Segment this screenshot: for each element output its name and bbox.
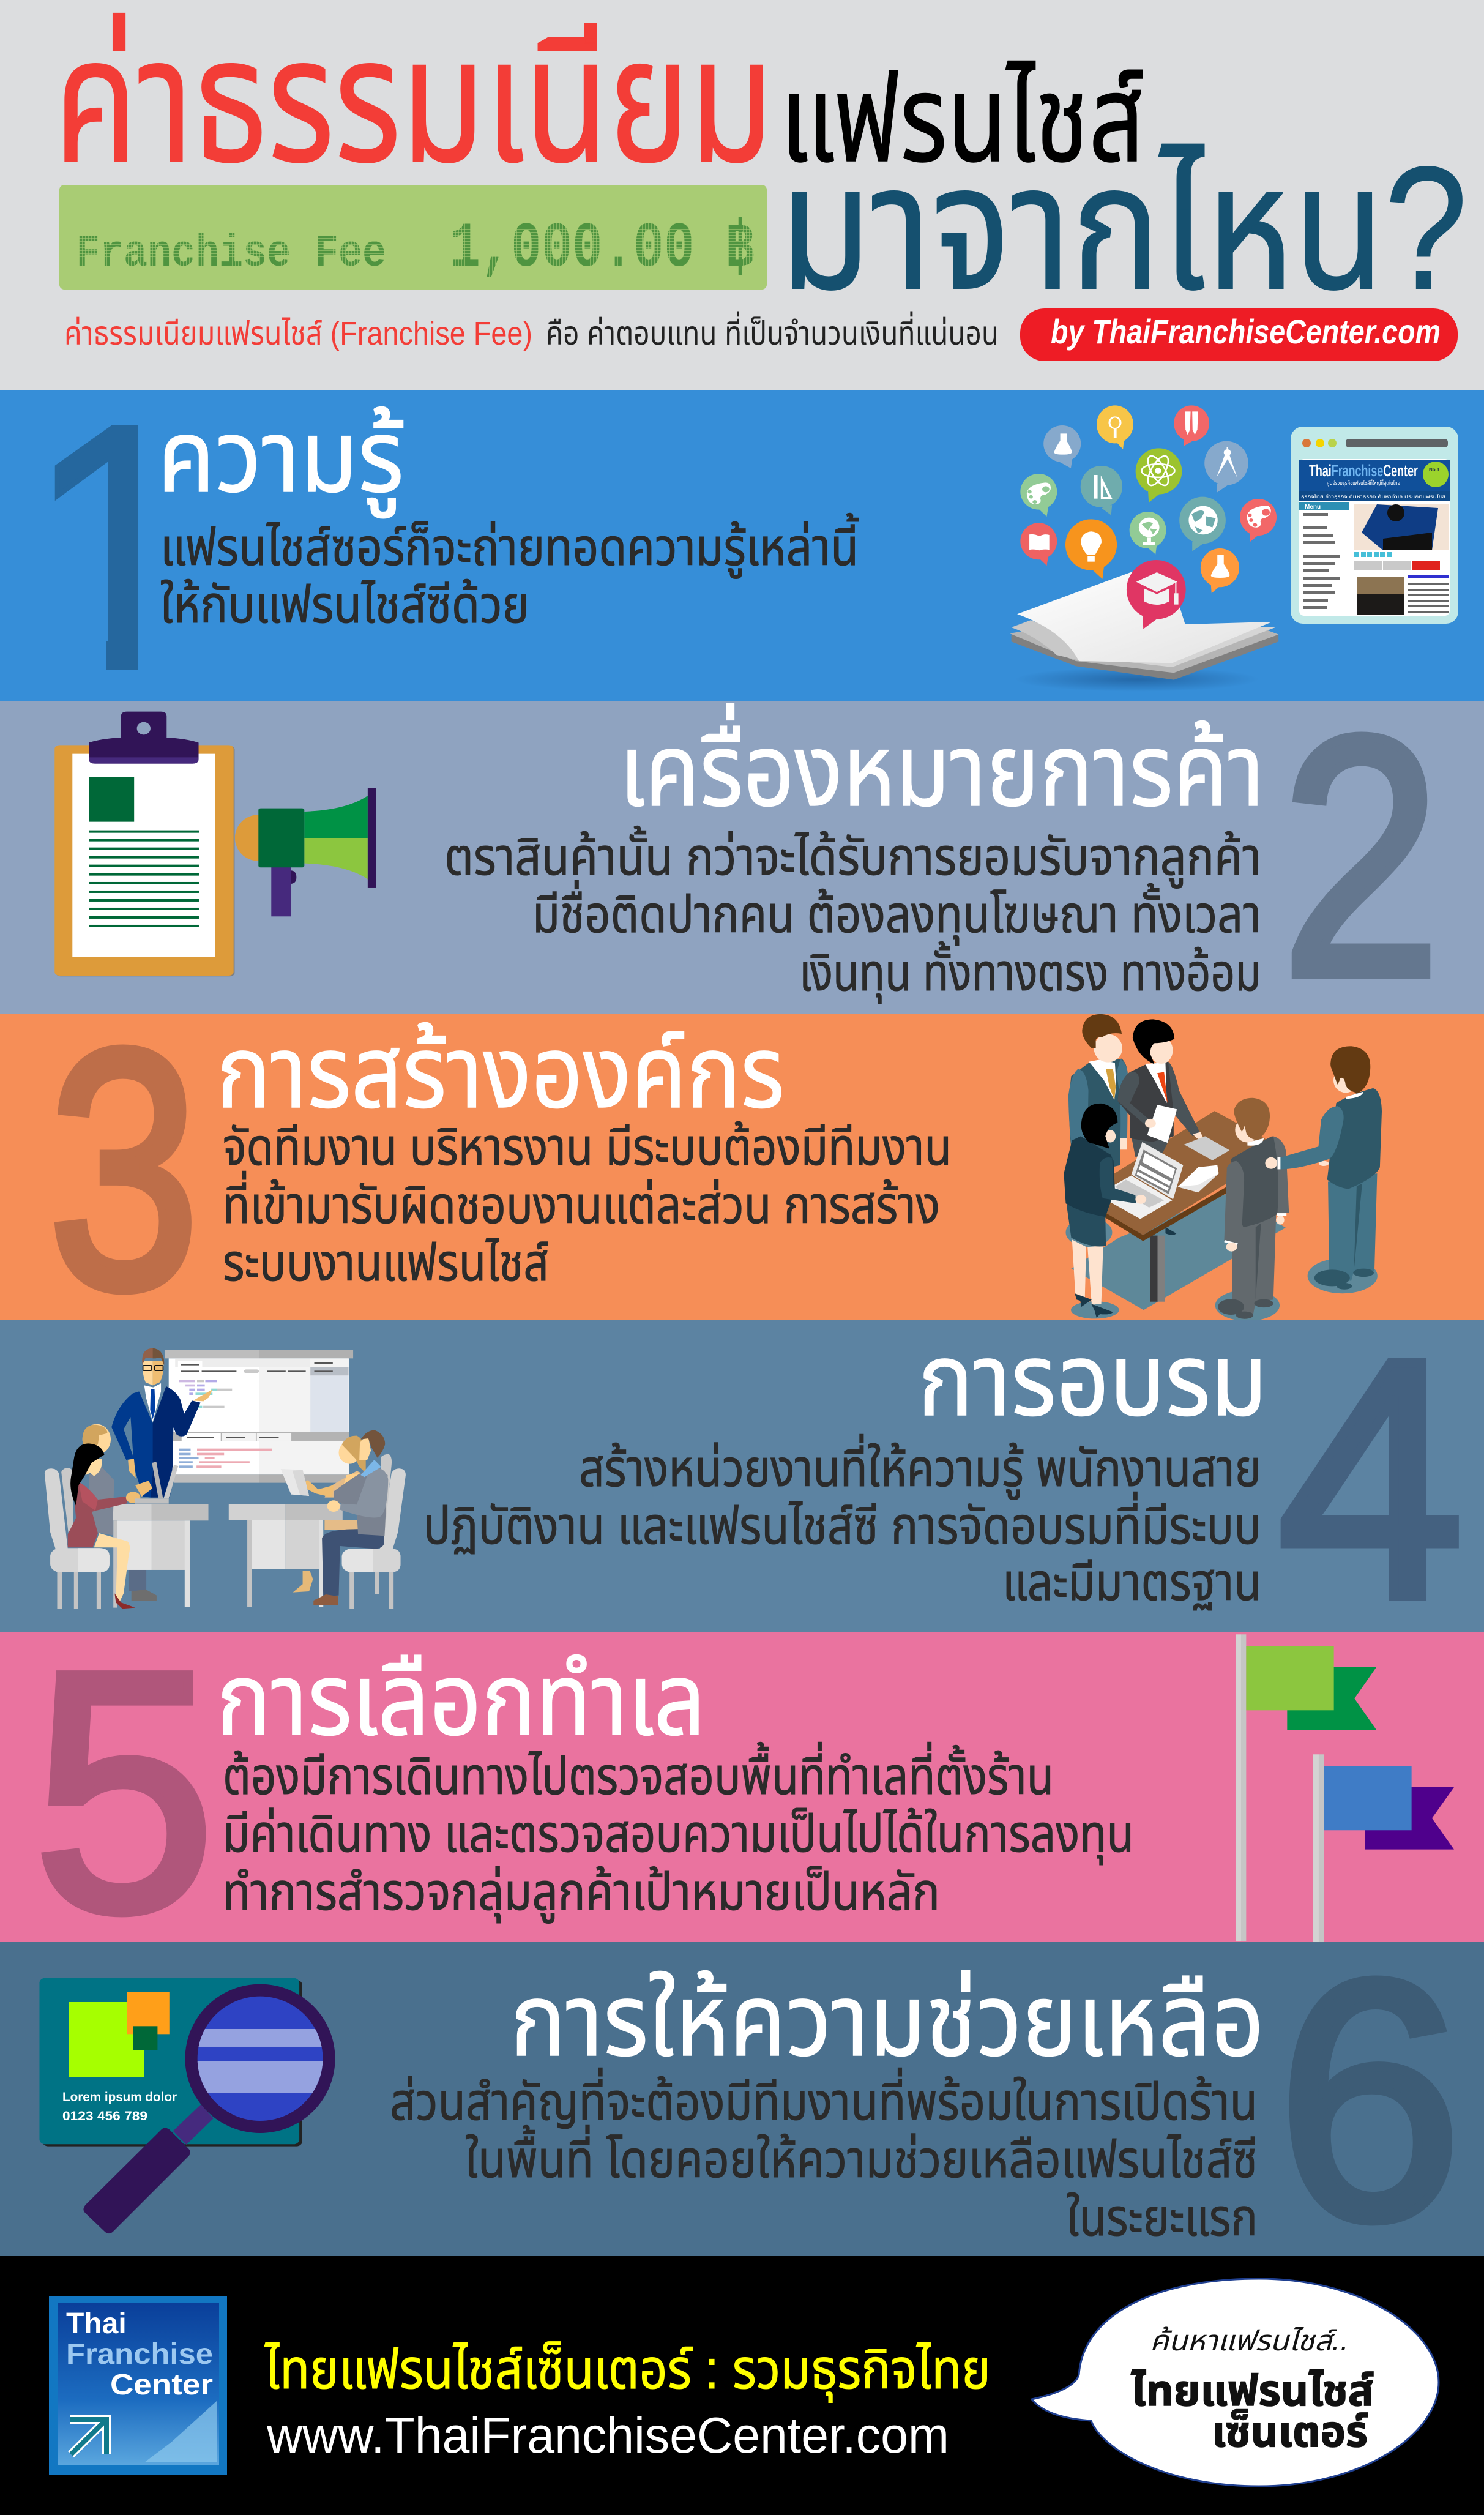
heading: การให้ความช่วยเหลือ (510, 1964, 1264, 2077)
body text (223, 1118, 952, 1291)
person: man in grey from behind (1218, 1098, 1289, 1319)
icon bubble: globe (1179, 497, 1226, 551)
website mockup (1291, 427, 1458, 624)
icon bubble: light bulb (1065, 519, 1117, 579)
panel 3: organisation (0, 979, 1484, 1359)
LCD fee display (59, 185, 767, 290)
numeral 1: 1 (24, 351, 214, 744)
illustration: clipboard and megaphone (54, 712, 376, 976)
LCD fee display: 1,000.00 ฿ (450, 213, 756, 285)
panel 2: trademark (0, 667, 1484, 1046)
panel 6: support (0, 1942, 1484, 2256)
body text (160, 513, 859, 633)
website mockup: ThaiFranchiseCenter (1309, 462, 1418, 480)
body text: ให้กับแฟรนไชส์ซีด้วย (160, 576, 529, 633)
icon bubble: flask (1043, 425, 1081, 468)
icon bubble: atom (1136, 448, 1182, 503)
body text: มีชื่อติดปากคน ต้องลงทุนโฆษณา ทั้งเวลา (532, 880, 1261, 946)
illustration: business card and magnifier: 0123 456 789 (62, 2109, 147, 2123)
person: woman with red tie (1117, 1019, 1205, 1157)
illustration: business card and magnifier (39, 1978, 335, 2233)
speech bubble: ค้นหาแฟรนไชส์.. (1150, 2325, 1349, 2356)
byline pill (1020, 308, 1458, 361)
subtitle (64, 311, 999, 352)
speech bubble (1032, 2279, 1439, 2486)
projector screen (165, 1350, 353, 1483)
subtitle: คือ ค่าตอบแทน ที่เป็นจำนวนเงินที่แน่นอน (546, 311, 999, 352)
presenter (111, 1348, 212, 1601)
icon bubble: magnifier (1097, 405, 1133, 449)
footer Thai name: ไทยแฟรนไชส์เซ็นเตอร์ : รวมธุรกิจไทย (264, 2339, 991, 2402)
table papers and laptop (1103, 1136, 1229, 1219)
speech bubble: เซ็นเตอร์ (1212, 2408, 1368, 2456)
right attendees (281, 1430, 406, 1609)
person: man in teal from behind (1265, 1046, 1382, 1290)
icon bubble: pens (1174, 405, 1209, 446)
LCD fee display: Franchise Fee (76, 228, 386, 280)
illustration: training room (45, 1348, 406, 1609)
left table (94, 1504, 209, 1608)
logo: Center (110, 2369, 213, 2401)
table (1078, 1111, 1283, 1302)
icon bubble: palette green (1020, 474, 1057, 517)
panel 5: location (0, 1602, 1484, 1981)
icon bubble: compass (1204, 441, 1248, 493)
body text: ที่เข้ามารับผิดชอบงานแต่ละส่วน การสร้าง (223, 1171, 940, 1234)
green flag (1236, 1634, 1376, 1941)
icon bubble: graduation cap (1127, 560, 1186, 629)
icon bubble: book (1020, 523, 1057, 566)
body text (223, 1742, 1134, 1923)
body text (390, 2068, 1258, 2246)
subtitle: ค่าธรรมเนียมแฟรนไชส์ (Franchise Fee) (64, 315, 532, 352)
heading: การอบรม (918, 1324, 1267, 1437)
website mockup: No.1 (1429, 467, 1440, 473)
body text: ในระยะแรก (1067, 2189, 1258, 2246)
heading: การเลือกทำเล (217, 1643, 706, 1756)
numeral 4: 4 (1278, 1289, 1464, 1669)
body text: แฟรนไชส์ซอร์ก็จะถ่ายทอดความรู้เหล่านี้ (160, 513, 859, 578)
body text: สร้างหน่วยงานที่ให้ความรู้ พนักงานสาย (579, 1434, 1261, 1500)
body text: มีค่าเดินทาง และตรวจสอบความเป็นไปได้ในการลงทุน (223, 1805, 1134, 1865)
numeral 3: 3 (48, 979, 199, 1359)
logo: Thai (66, 2308, 127, 2340)
speech bubble: ไทยแฟรนไชส์ (1131, 2367, 1374, 2415)
header panel (0, 0, 1484, 390)
body text: ทำการสำรวจกลุ่มลูกค้าเป้าหมายเป็นหลัก (223, 1863, 940, 1923)
body text: เงินทุน ทั้งทางตรง ทางอ้อม (799, 941, 1261, 1004)
body text: ในพื้นที่ โดยคอยให้ความช่วยเหลือแฟรนไชส์ซี (465, 2125, 1258, 2188)
body text: จัดทีมงาน บริหารงาน มีระบบต้องมีทีมงาน (223, 1118, 952, 1176)
website mockup: ธุรกิจไทย ข่าวธุรกิจ ค้นหาธุรกิจ ค้นหาทำเล ประเภทแฟรนไชส์ (1301, 493, 1446, 499)
clipboard (54, 712, 234, 976)
logo (49, 2296, 227, 2475)
body text: ระบบงานแฟรนไชส์ (223, 1234, 549, 1291)
right table (229, 1504, 343, 1607)
icon bubble: flask orange (1201, 548, 1239, 593)
icon bubble: set square (1081, 466, 1122, 515)
body text: ส่วนสำคัญที่จะต้องมีทีมงานที่พร้อมในการเปิดร้าน (390, 2068, 1258, 2131)
panel 4: training (0, 1289, 1484, 1669)
illustration: business team at table (1064, 1014, 1382, 1321)
icon bubble: palette red (1240, 499, 1277, 542)
panel 1: knowledge (0, 390, 1484, 701)
title: black: แฟรนไชส์ (780, 51, 1144, 187)
body text: และมีมาตรฐาน (1002, 1553, 1261, 1611)
person: man with yellow tie (1068, 1014, 1128, 1169)
body text: ปฏิบัติงาน และแฟรนไชส์ซี การจัดอบรมที่มีระบบ (423, 1492, 1261, 1555)
logo: Franchise (66, 2338, 213, 2371)
icon bubble: desk globe (1130, 512, 1166, 555)
blue flag (1313, 1754, 1454, 1943)
left attendees (45, 1424, 178, 1609)
numeral 5: 5 (34, 1602, 215, 1981)
heading: ความรู้ (157, 400, 404, 518)
heading: เครื่องหมายการค้า (619, 703, 1264, 827)
body text (423, 1434, 1261, 1611)
illustration: book with icon bubbles (1010, 405, 1278, 692)
megaphone (235, 788, 376, 916)
body text (444, 826, 1261, 1004)
heading: การสร้างองค์กร (217, 1016, 785, 1129)
website mockup: Menu (1305, 504, 1321, 510)
body text: ต้องมีการเดินทางไปตรวจสอบพื้นที่ทำเลที่ตั้งร้าน (223, 1742, 1054, 1805)
website mockup: ศูนย์รวมธุรกิจแฟรนไชส์ที่ใหญ่ที่สุดในไทย (1327, 479, 1400, 487)
body text: ตราสินค้านั้น กว่าจะได้รับการยอมรับจากลูกค้า (444, 826, 1261, 888)
footer panel (0, 2256, 1484, 2515)
title: red: ค่าธรรมเนียม (54, 4, 774, 198)
illustration: two flags (1236, 1634, 1454, 1943)
illustration: business card and magnifier: Lorem ipsum dolor (62, 2090, 177, 2104)
numeral 6: 6 (1277, 1910, 1462, 2290)
person: seated woman at laptop (1064, 1104, 1146, 1318)
footer website: www.ThaiFranchiseCenter.com (266, 2407, 949, 2464)
numeral 2: 2 (1281, 667, 1441, 1046)
